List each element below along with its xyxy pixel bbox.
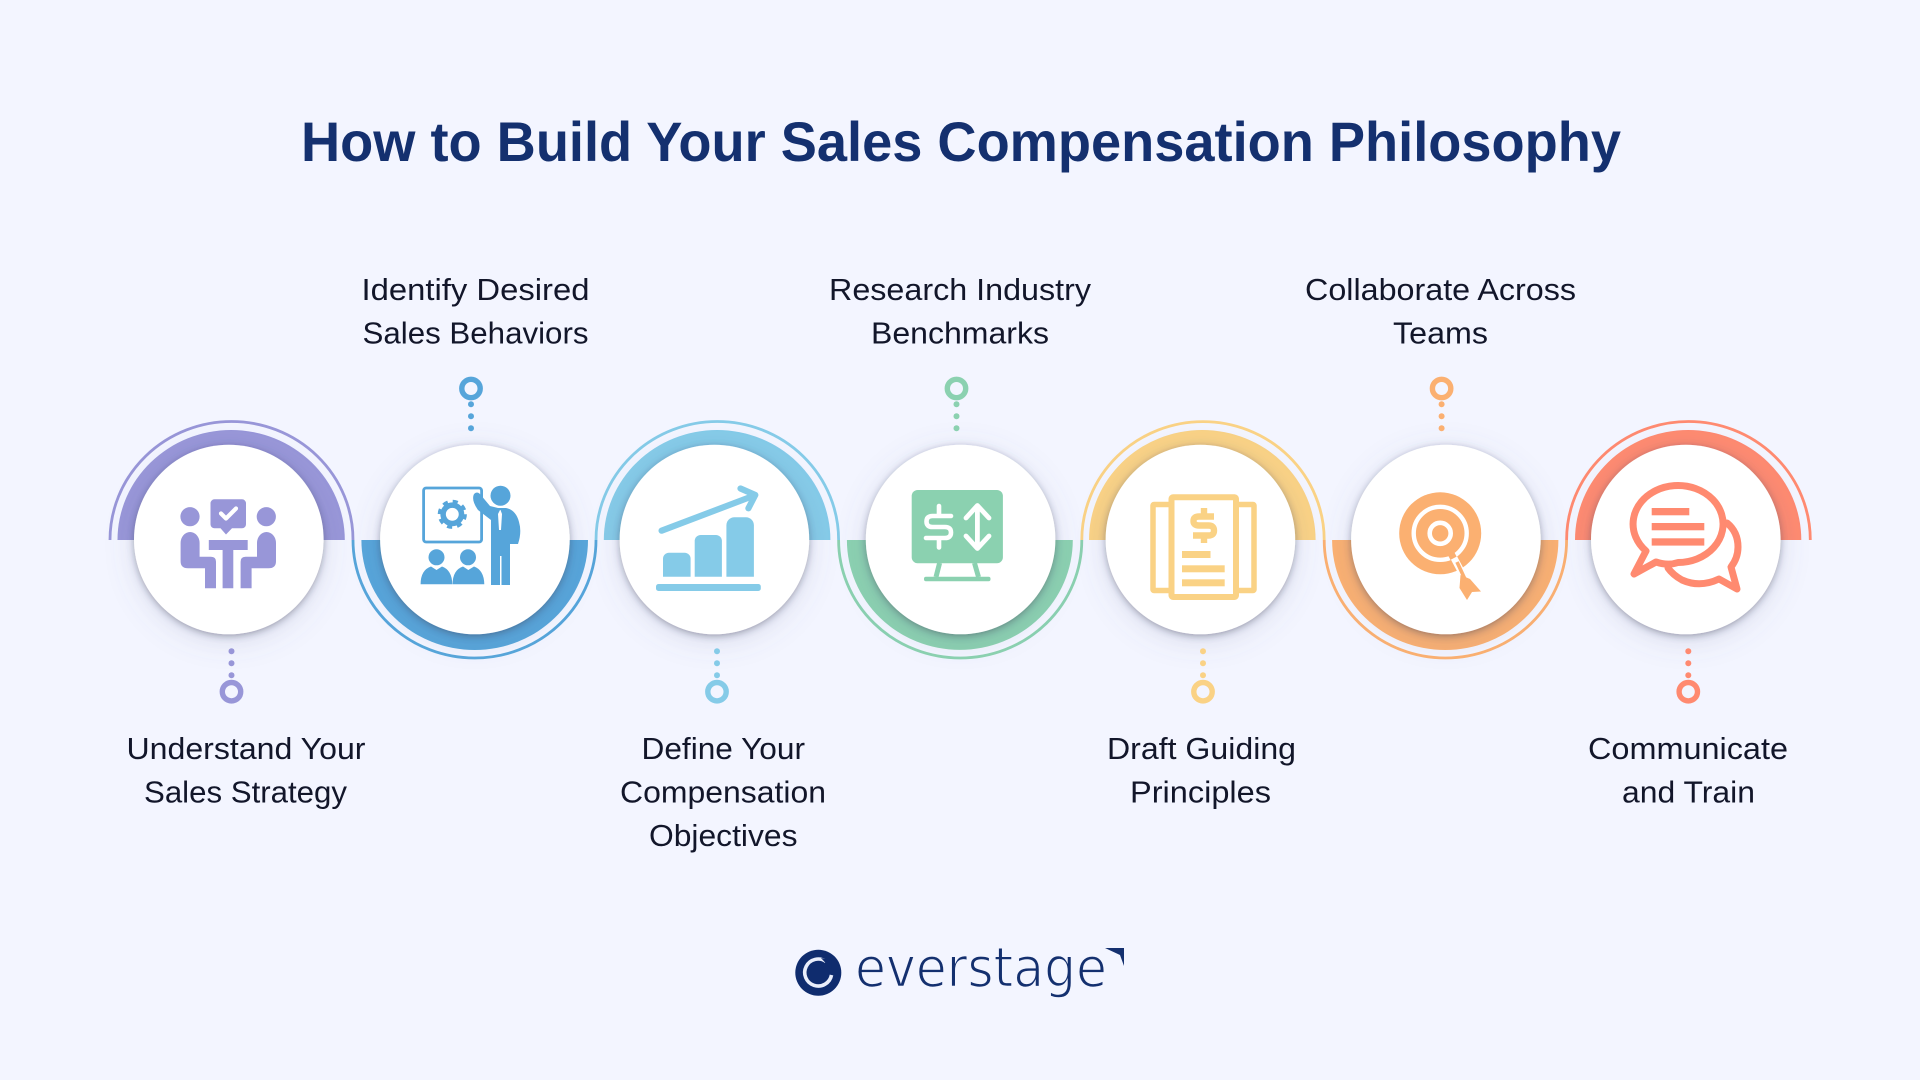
label — [829, 272, 1092, 350]
logo mark — [795, 950, 841, 996]
connector dots — [954, 401, 960, 431]
label: Compensation — [620, 774, 826, 809]
label: Identify Desired — [362, 272, 590, 307]
arc band: coral — [1575, 430, 1801, 540]
arc line: green — [839, 540, 1082, 658]
label: Research Industry — [829, 272, 1092, 307]
title: How to Build Your Sales Compensation Philosophy — [301, 110, 1621, 173]
ring marker — [1194, 682, 1212, 701]
arc line: blue — [353, 540, 596, 658]
circle — [620, 445, 809, 634]
circle — [1351, 445, 1541, 634]
arc band: yellow — [1089, 430, 1316, 540]
connector dots — [1439, 401, 1445, 431]
step 2: Identify Desired Sales Behaviors — [353, 272, 596, 658]
step 7: Communicate and Train — [1567, 421, 1810, 809]
step 1: Understand Your Sales Strategy — [110, 422, 366, 809]
ring marker — [947, 379, 966, 398]
connector dots — [1685, 648, 1691, 678]
label — [1305, 272, 1576, 350]
connector dots — [468, 401, 474, 431]
label: Benchmarks — [871, 315, 1049, 350]
ring marker — [462, 379, 480, 398]
label: Draft Guiding — [1107, 731, 1296, 766]
label: Define Your — [642, 731, 805, 766]
icon: presenter with audience — [421, 486, 520, 585]
label: Collaborate Across — [1305, 272, 1576, 307]
step 3: Define Your Compensation Objectives — [596, 422, 839, 853]
ring marker — [222, 682, 241, 701]
ring marker — [1432, 379, 1451, 398]
step 6: Collaborate Across Teams — [1305, 272, 1576, 658]
connector dots — [228, 648, 234, 678]
step 4: Research Industry Benchmarks — [829, 272, 1092, 658]
arc band: light blue — [604, 430, 830, 540]
arc line: light blue — [596, 422, 839, 540]
arc band: green — [847, 540, 1073, 650]
arc line: purple — [110, 422, 353, 540]
label: Principles — [1130, 774, 1271, 809]
wordmark corner accent — [1105, 948, 1124, 966]
arc band: purple — [118, 430, 345, 540]
circle — [1591, 445, 1781, 634]
label: Sales Strategy — [144, 774, 348, 809]
ring marker — [1679, 682, 1698, 701]
ring marker — [708, 682, 726, 701]
wordmark: everstage — [855, 936, 1107, 1000]
label — [126, 731, 366, 809]
label: and Train — [1622, 774, 1755, 809]
label: Teams — [1393, 315, 1488, 350]
icon: rising bar chart — [656, 488, 761, 591]
circle — [134, 445, 324, 634]
label — [1107, 731, 1296, 809]
arc band: blue — [361, 540, 588, 650]
connector dots — [714, 648, 720, 678]
label: Communicate — [1588, 731, 1788, 766]
connector dots — [1200, 648, 1206, 678]
arc line: coral — [1567, 421, 1810, 540]
label — [1588, 731, 1788, 809]
circle — [380, 445, 570, 634]
circle — [866, 445, 1055, 634]
label: Understand Your — [126, 731, 366, 766]
arc band: orange — [1332, 540, 1558, 650]
icon: target with dart — [1399, 492, 1481, 600]
icon: monitor with dollar and arrows — [912, 490, 1003, 581]
arc line: orange — [1324, 540, 1567, 658]
step 5: Draft Guiding Principles — [1082, 422, 1324, 809]
icon: meeting at table — [180, 499, 276, 588]
circle — [1106, 445, 1295, 634]
label: Objectives — [649, 818, 798, 853]
logo: everstage — [795, 936, 1124, 1000]
arc line: yellow — [1082, 422, 1324, 540]
label: Sales Behaviors — [362, 315, 588, 350]
label — [362, 272, 590, 350]
label — [620, 731, 826, 853]
icon: chat bubbles — [1633, 486, 1738, 589]
icon: document with dollar — [1153, 497, 1254, 597]
